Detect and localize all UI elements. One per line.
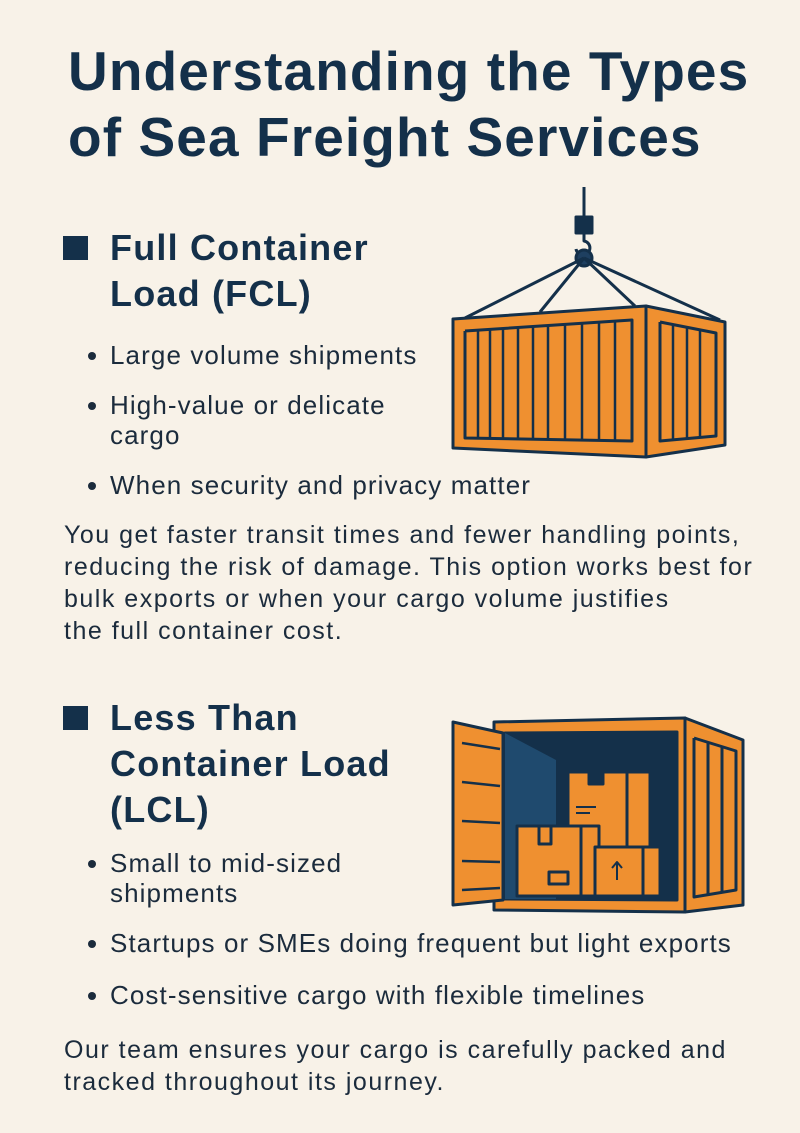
heading marker bbox=[63, 236, 88, 260]
heading: LCL: Less Than bbox=[110, 697, 299, 738]
title bbox=[68, 40, 749, 168]
title: Understanding the Types bbox=[68, 40, 749, 102]
paragraph: the full container cost. bbox=[64, 617, 343, 645]
paragraph bbox=[64, 1036, 727, 1096]
paragraph: reducing the risk of damage. This option works best for bbox=[64, 553, 753, 581]
bullet: cargo bbox=[110, 420, 181, 450]
paragraph: You get faster transit times and fewer handling points, bbox=[64, 521, 740, 549]
paragraph: Our team ensures your cargo is carefully packed and bbox=[64, 1036, 727, 1064]
bullet bbox=[110, 848, 342, 908]
paragraph bbox=[64, 521, 753, 645]
bullet: shipments bbox=[110, 878, 238, 908]
bullet bbox=[110, 390, 386, 450]
heading: FCL: Full Container bbox=[110, 227, 369, 268]
heading: LCL: (LCL) bbox=[110, 789, 210, 830]
title: of Sea Freight Services bbox=[68, 106, 702, 168]
paragraph: bulk exports or when your cargo volume justifies bbox=[64, 585, 670, 613]
bullet: Cost-sensitive cargo with flexible timelines bbox=[110, 980, 645, 1010]
bullet: Startups or SMEs doing frequent but light exports bbox=[110, 928, 732, 958]
bullet: High-value or delicate bbox=[110, 390, 386, 420]
heading: LCL bbox=[110, 697, 391, 830]
bullet: Large volume shipments bbox=[110, 340, 417, 370]
heading: FCL: Load (FCL) bbox=[110, 273, 312, 314]
section: LCL bbox=[63, 697, 732, 1096]
bullet: When security and privacy matter bbox=[110, 470, 531, 500]
paragraph: tracked throughout its journey. bbox=[64, 1068, 445, 1096]
heading marker bbox=[63, 706, 88, 730]
heading: LCL: Container Load bbox=[110, 743, 391, 784]
heading: FCL bbox=[110, 227, 369, 314]
section: FCL bbox=[63, 227, 753, 645]
bullet: Small to mid-sized bbox=[110, 848, 342, 878]
